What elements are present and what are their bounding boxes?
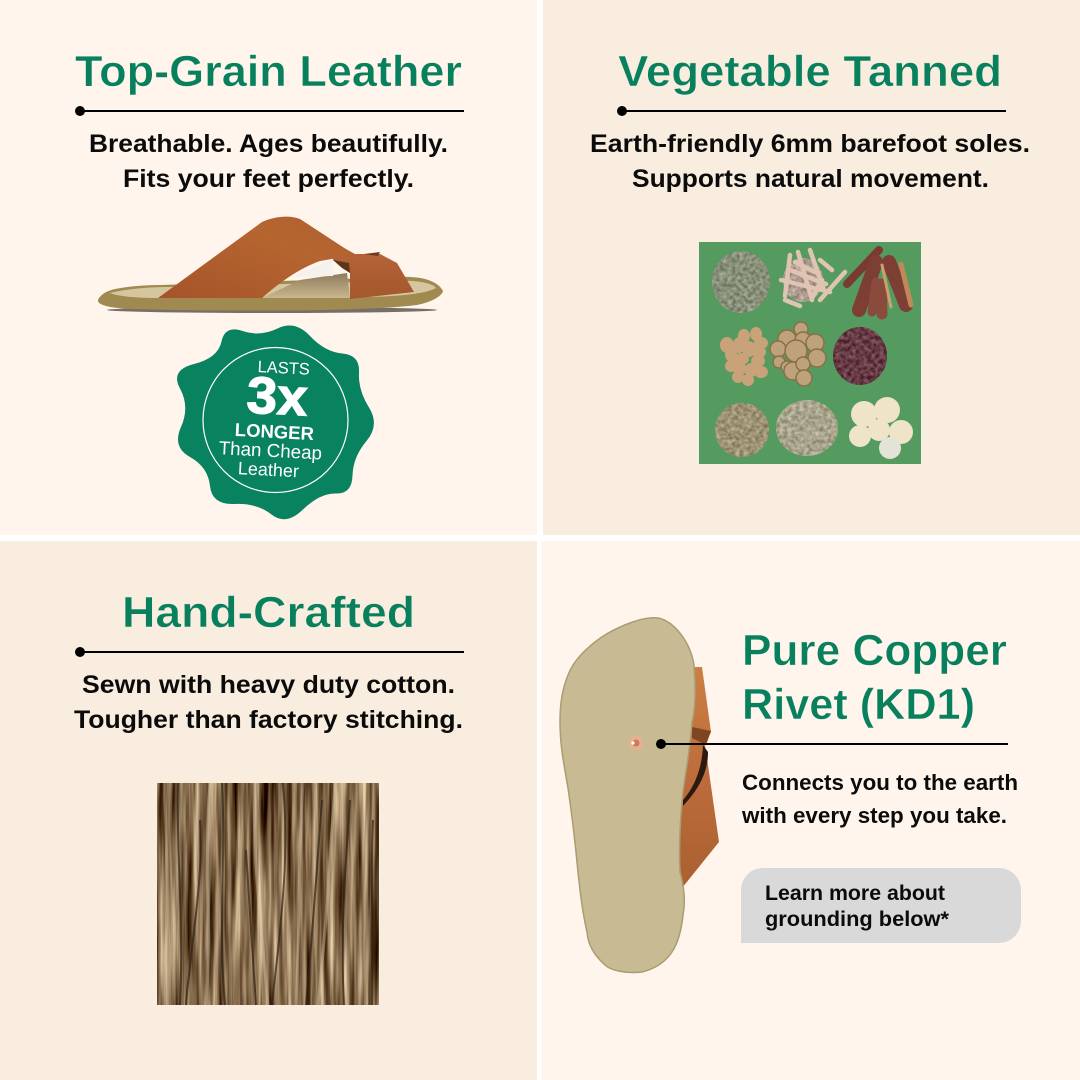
description: Breathable. Ages beautifully.	[89, 130, 448, 158]
pointer rule with dot	[656, 739, 1008, 749]
panel background	[541, 541, 1080, 1080]
description: Sewn with heavy duty cotton.	[82, 671, 455, 699]
image: sandal sole with copper rivet	[560, 618, 719, 973]
panel background	[543, 0, 1080, 535]
description: Tougher than factory stitching.	[74, 706, 463, 734]
heading: Top-Grain Leather	[75, 47, 462, 96]
description: Fits your feet perfectly.	[123, 165, 414, 193]
description	[74, 671, 463, 734]
panel background	[0, 0, 537, 535]
image: tanning plant materials	[699, 242, 921, 464]
heading: Hand-Crafted	[122, 588, 415, 637]
description: Earth-friendly 6mm barefoot soles.	[590, 130, 1030, 158]
panel: vegetable tanned	[543, 0, 1080, 535]
image: cotton thread	[157, 783, 379, 1005]
description: Supports natural movement.	[632, 165, 989, 193]
panel: pure copper rivet	[541, 541, 1080, 1080]
badge: lasts 3x longer: LONGER	[234, 419, 314, 444]
heading: Rivet (KD1)	[742, 680, 975, 729]
image: leather sandal side view	[98, 217, 443, 313]
copper rivet	[629, 736, 643, 750]
heading rule with dot	[617, 106, 1006, 116]
heading: Pure Copper	[742, 626, 1007, 675]
badge: lasts 3x longer: LASTS	[257, 358, 310, 379]
heading	[742, 626, 1007, 729]
button: learn more: Learn more about	[765, 881, 945, 905]
heading rule with dot	[75, 647, 464, 657]
description: Connects you to the earth	[742, 770, 1018, 795]
panel: hand-crafted	[0, 541, 537, 1080]
badge: lasts 3x longer: Leather	[237, 458, 299, 481]
description	[741, 770, 1018, 828]
panel: top-grain leather	[0, 0, 537, 535]
description	[590, 130, 1030, 193]
heading rule with dot	[75, 106, 464, 116]
description	[89, 130, 448, 193]
badge: lasts 3x longer	[177, 326, 374, 519]
button: learn more: grounding below*	[765, 907, 950, 931]
badge: lasts 3x longer: 3x	[245, 367, 309, 428]
description: with every step you take.	[741, 803, 1007, 828]
badge: lasts 3x longer: Than Cheap	[218, 437, 323, 463]
panel background	[0, 541, 537, 1080]
button: learn more	[741, 868, 1021, 943]
heading: Vegetable Tanned	[618, 47, 1002, 96]
